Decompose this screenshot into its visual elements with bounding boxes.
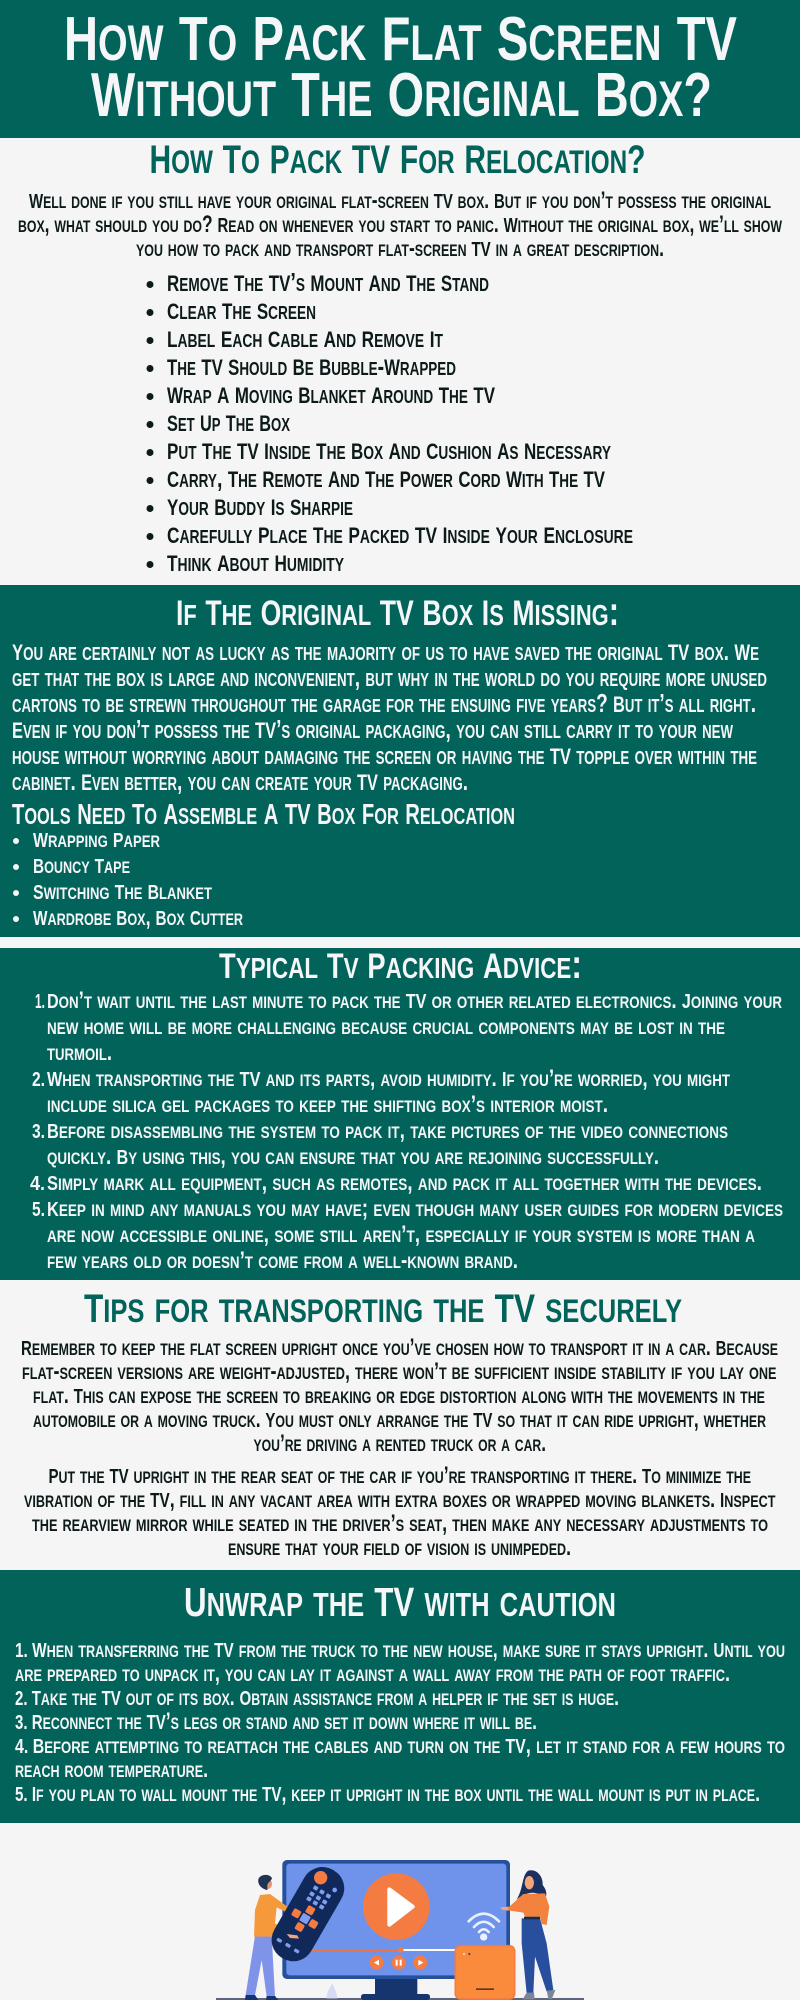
tools list: Wrapping Paper xyxy=(33,826,160,853)
packing steps list: Your Buddy Is Sharpie xyxy=(167,491,353,521)
intro paragraph: you how to pack and transport flat-screen TV in a great description. xyxy=(136,235,664,262)
packing steps list: Carefully Place The Packed TV Inside Your Enclosure xyxy=(167,519,633,549)
woman figure xyxy=(500,1870,555,1999)
intro paragraph xyxy=(18,187,783,262)
television xyxy=(282,1860,510,2000)
paragraph: box missing: house without worrying about damaging the screen or having the TV topple over within the xyxy=(12,740,757,770)
progress bar xyxy=(310,1947,458,1953)
panel: tips for transporting the TV securely xyxy=(0,1280,800,1570)
packing steps list: The TV Should Be Bubble-Wrapped xyxy=(167,351,456,381)
numbered advice list: 1. xyxy=(35,990,45,1013)
heading: transport tips: Tips for transporting the TV securely xyxy=(84,1280,682,1332)
icon: wifi xyxy=(469,1914,499,1941)
packing steps list: Put The TV Inside The Box And Cushion As Necessary xyxy=(167,435,611,465)
unwrap steps xyxy=(15,1636,785,1807)
numbered advice list: turmoil. xyxy=(47,1039,112,1066)
numbered advice list: include silica gel packages to keep the shifting box’s interior moist. xyxy=(47,1091,608,1118)
unwrap steps: 2. Take the TV out of its box. Obtain assistance from a helper if the set is huge. xyxy=(15,1684,619,1711)
packing steps list: Remove The TV’s Mount And The Stand xyxy=(167,267,489,297)
paragraph: keep upright: you’re driving a rented truck or a car. xyxy=(254,1430,546,1457)
heading: how to pack TV: How To Pack TV For Relocation? xyxy=(150,131,645,183)
unwrap steps: 3. Reconnect the TV’s legs or stand and set it down where it will be. xyxy=(15,1708,537,1735)
title banner: Without The Original Box? xyxy=(91,52,712,132)
numbered advice list: Don’t wait until the last minute to pack the TV or other related electronics. Joining your xyxy=(47,987,782,1014)
title banner xyxy=(0,0,800,138)
heading: box missing: If The Original TV Box Is Missing: xyxy=(176,588,619,634)
packing steps list: Think About Humidity xyxy=(167,547,344,577)
illustration: people with TV, remote and router xyxy=(216,1859,584,2000)
numbered advice list: 4. xyxy=(30,1172,45,1195)
panel: unwrap the TV with caution xyxy=(0,1570,800,1823)
packing steps list: Clear The Screen xyxy=(167,295,316,325)
numbered advice list xyxy=(30,987,783,1274)
man figure xyxy=(245,1875,298,2000)
numbered advice list: quickly. By using this, you can ensure that you are rejoining successfully. xyxy=(47,1143,659,1170)
packing steps list: Carry, The Remote And The Power Cord With The TV xyxy=(167,463,605,493)
paragraph: box missing xyxy=(12,636,767,796)
panel: if the original TV box is missing xyxy=(0,585,800,937)
tools list: Wardrobe Box, Box Cutter xyxy=(33,904,243,931)
playback controls xyxy=(370,1956,427,1970)
paragraph: keep upright xyxy=(21,1334,778,1457)
paragraph: rear seat: ensure that your field of vision is unimpeded. xyxy=(228,1534,571,1561)
router box xyxy=(455,1946,515,1999)
icon: play button xyxy=(363,1873,430,1940)
tools list: Switching The Blanket xyxy=(33,878,212,905)
packing steps list xyxy=(146,267,633,577)
numbered advice list: 3. xyxy=(32,1120,45,1143)
tools list: Bouncy Tape xyxy=(33,852,130,879)
packing steps list: Set Up The Box xyxy=(167,407,290,437)
numbered advice list: 5. xyxy=(32,1198,45,1221)
unwrap steps: reach room temperature. xyxy=(15,1756,208,1783)
numbered advice list: few years old or doesn’t come from a well-known brand. xyxy=(47,1247,518,1274)
panel: how to pack TV for relocation xyxy=(0,131,800,585)
packing steps list: Wrap A Moving Blanket Around The TV xyxy=(167,379,495,409)
paragraph: rear seat xyxy=(24,1462,776,1561)
man's hand xyxy=(287,1934,299,1939)
subheading: tools: Tools Need To Assemble A TV Box For Relocation xyxy=(12,794,515,831)
icon: plant xyxy=(327,1983,337,1998)
heading: packing advice: Typical Tv Packing Advice: xyxy=(219,941,582,987)
paragraph: box missing: cabinet. Even better, you can create your TV packaging. xyxy=(12,766,468,796)
numbered advice list: When transporting the TV and its parts, avoid humidity. If you’re worried, you might xyxy=(47,1065,730,1092)
packing steps list: Label Each Cable And Remove It xyxy=(167,323,443,353)
remote control xyxy=(264,1859,352,1969)
panel: typical TV packing advice xyxy=(0,941,800,1280)
heading: unwrap: Unwrap the TV with caution xyxy=(184,1573,616,1626)
numbered advice list: 2. xyxy=(32,1068,45,1091)
tools list xyxy=(13,826,243,931)
